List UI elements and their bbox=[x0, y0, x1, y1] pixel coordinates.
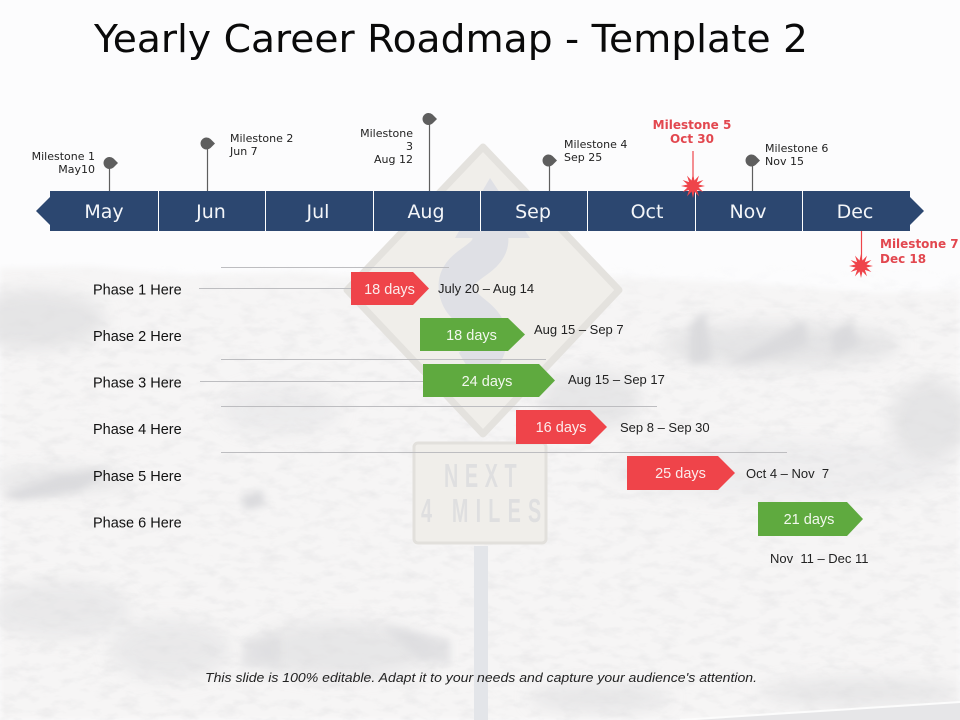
phase labels bbox=[93, 282, 182, 532]
milestone 1: May10 bbox=[58, 163, 95, 176]
milestone 2: Jun 7 bbox=[229, 145, 258, 158]
phase 5 bar bbox=[627, 456, 735, 490]
milestone 7: Dec 18 bbox=[880, 252, 926, 266]
phase 6 bar: 21 days bbox=[784, 512, 834, 528]
milestone 4: Milestone 4 bbox=[564, 138, 627, 151]
milestone 2 bbox=[201, 132, 293, 191]
phase 3 bar: 24 days bbox=[462, 374, 512, 390]
milestone 4 bbox=[543, 138, 627, 191]
phase 5 bar: 25 days bbox=[655, 466, 706, 482]
month labels: May bbox=[84, 201, 124, 223]
month labels: Oct bbox=[631, 201, 663, 223]
milestone 3: 3 bbox=[406, 140, 413, 153]
timeline bar bbox=[36, 191, 924, 231]
month labels: Nov bbox=[729, 201, 767, 223]
background: road sign: NEXT bbox=[444, 457, 523, 494]
phase 1 bar: 18 days bbox=[364, 282, 415, 298]
milestone 6 bbox=[746, 142, 828, 191]
phase labels: Phase 6 Here bbox=[93, 516, 182, 532]
milestone 3: Aug 12 bbox=[374, 153, 413, 166]
month labels: Jul bbox=[306, 201, 329, 223]
milestone 5: Oct 30 bbox=[670, 132, 714, 146]
milestone 4: Sep 25 bbox=[564, 151, 602, 164]
phase 6 bar bbox=[758, 502, 863, 536]
phase 2 bar: 18 days bbox=[446, 328, 497, 344]
phase 2 bar bbox=[420, 318, 525, 351]
phase 4 dates: Sep 8 – Sep 30 bbox=[620, 420, 710, 435]
milestone 7: Milestone 7 bbox=[880, 237, 959, 251]
phase 3 bar bbox=[423, 364, 555, 397]
month labels: Aug bbox=[407, 201, 445, 223]
milestone 6: Milestone 6 bbox=[765, 142, 828, 155]
phase labels: Phase 5 Here bbox=[93, 469, 182, 485]
background: road sign: 4 MILES bbox=[421, 492, 548, 529]
milestone 2: Milestone 2 bbox=[230, 132, 293, 145]
month labels: Sep bbox=[515, 201, 551, 223]
background: desert photo bbox=[0, 270, 960, 720]
phase guide lines bbox=[199, 268, 787, 452]
phase 4 bar: 16 days bbox=[536, 420, 586, 436]
phase 2 dates: Aug 15 – Sep 7 bbox=[534, 322, 624, 337]
phase 1 dates: July 20 – Aug 14 bbox=[438, 281, 534, 296]
month labels: Jun bbox=[195, 201, 226, 223]
milestone 1: Milestone 1 bbox=[32, 150, 95, 163]
phase 3 dates: Aug 15 – Sep 17 bbox=[568, 372, 665, 387]
milestone 3 bbox=[360, 113, 437, 191]
title: Yearly Career Roadmap - Template 2 bbox=[93, 17, 808, 62]
milestone 5 bbox=[653, 118, 731, 198]
phase 5 dates: Oct 4 – Nov 7 bbox=[746, 466, 829, 481]
phase labels: Phase 3 Here bbox=[93, 376, 182, 392]
phase 4 bar bbox=[516, 410, 607, 444]
footer note: This slide is 100% editable. Adapt it to your needs and capture your audience's attention. bbox=[205, 670, 757, 685]
month labels: Dec bbox=[837, 201, 873, 223]
phase labels: Phase 2 Here bbox=[93, 329, 182, 345]
phase labels: Phase 4 Here bbox=[93, 422, 182, 438]
month labels bbox=[84, 201, 873, 223]
milestone 7 bbox=[849, 231, 959, 278]
milestone 5: Milestone 5 bbox=[653, 118, 731, 132]
milestone 3: Milestone bbox=[360, 127, 413, 140]
background: road sign bbox=[347, 147, 619, 720]
milestone 6: Nov 15 bbox=[765, 155, 804, 168]
phase labels: Phase 1 Here bbox=[93, 282, 182, 298]
phase 1 bar bbox=[351, 272, 429, 305]
milestone 1 bbox=[32, 150, 118, 191]
phase 6 dates: Nov 11 – Dec 11 bbox=[770, 551, 869, 566]
